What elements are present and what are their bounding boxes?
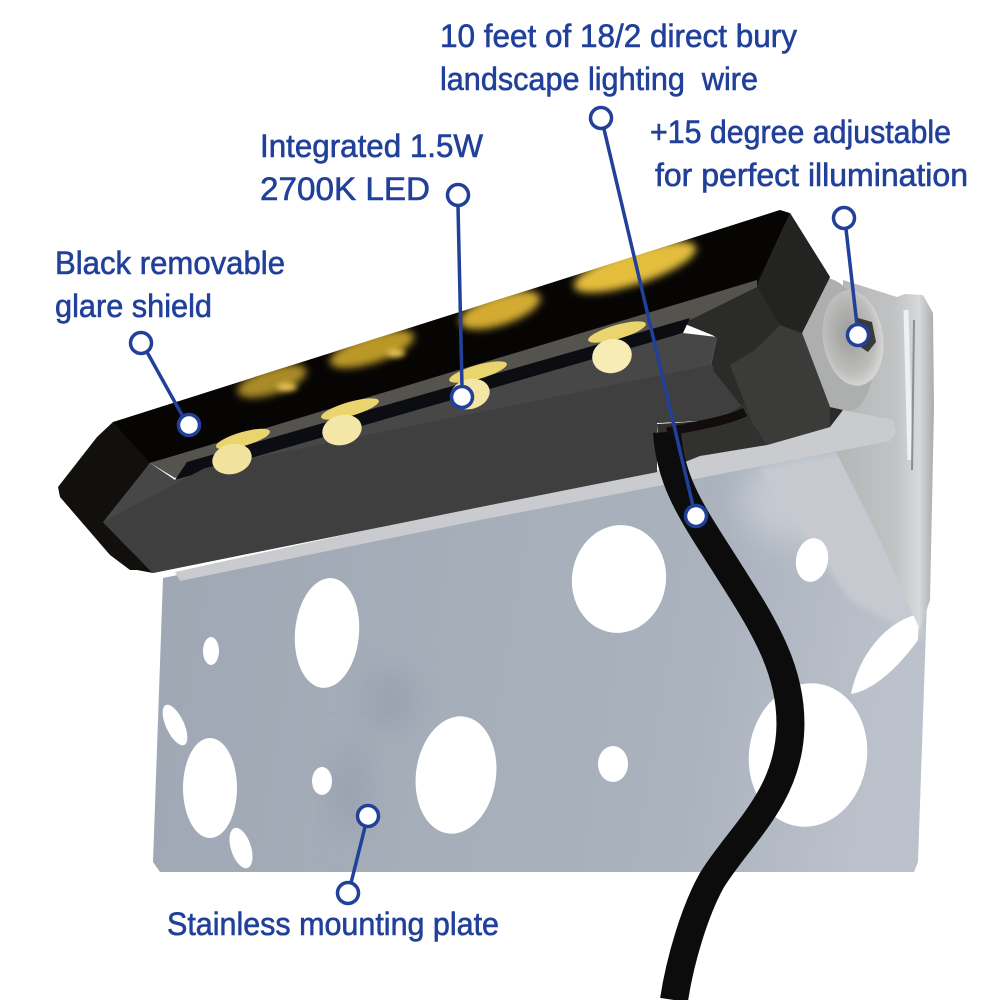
silver mounting flange	[175, 410, 896, 581]
black glare shield	[58, 210, 790, 573]
front bar	[103, 333, 745, 573]
callout: glare shield: Black removable	[55, 245, 285, 281]
callout: mounting plate: Stainless mounting plate	[167, 906, 499, 942]
LED slot	[175, 318, 690, 480]
screw head	[817, 286, 889, 390]
mounting ear	[786, 271, 934, 630]
washer	[786, 271, 884, 419]
shield outer body	[58, 210, 790, 573]
callout: glare shield: glare shield	[55, 288, 212, 324]
callout: adjustable: for perfect illumination	[655, 157, 968, 193]
shield interior and light reflections	[113, 210, 790, 463]
fixture housing	[103, 213, 843, 573]
callout: wire	[440, 18, 797, 526]
callout: glare shield	[55, 245, 285, 436]
callout: wire: landscape lighting wire	[440, 61, 758, 97]
callout: LED: Integrated 1.5W	[260, 128, 484, 164]
callout: LED	[260, 128, 484, 408]
callout: wire: 10 feet of 18/2 direct bury	[440, 18, 797, 54]
right end housing	[690, 213, 843, 445]
black direct bury wire	[667, 432, 790, 1000]
callout: LED: 2700K LED	[260, 171, 430, 207]
callout: adjustable: +15 degree adjustable	[650, 114, 951, 150]
plate body	[153, 405, 933, 872]
callout: mounting plate	[167, 806, 499, 942]
stainless mounting plate	[153, 452, 927, 872]
LED modules	[209, 317, 648, 479]
plate holes	[158, 519, 919, 871]
housing top lip	[150, 280, 757, 478]
callout: adjustable	[650, 114, 968, 346]
housing backing	[680, 287, 790, 420]
